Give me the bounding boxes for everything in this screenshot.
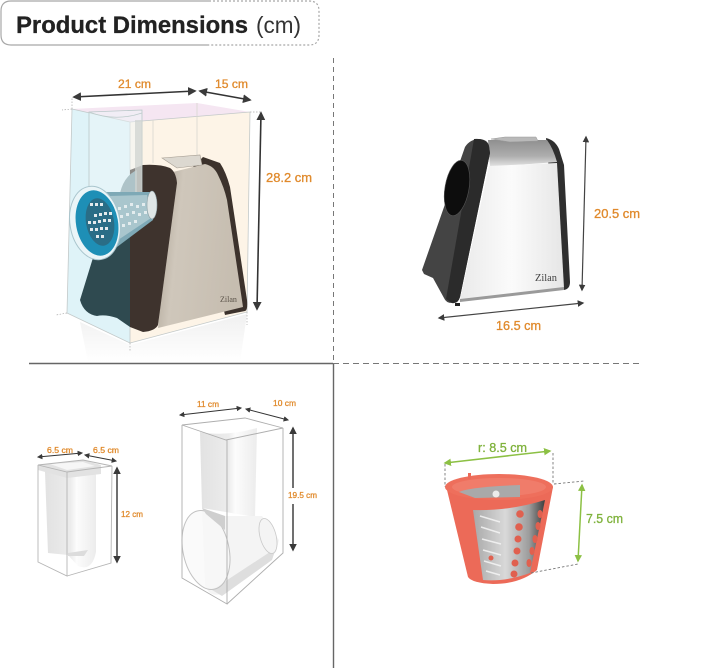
dimension 6.5 cm depth: 6.5 cm	[93, 446, 119, 455]
feet	[455, 303, 460, 306]
guide lines	[445, 453, 584, 573]
panel: pusher	[38, 446, 143, 576]
dimension 21 cm: 21 cm	[118, 77, 151, 91]
dimension 7.5 cm: 7.5 cm	[586, 512, 623, 526]
drive opening	[440, 158, 474, 218]
panel dividers	[29, 58, 640, 668]
panel: grater cone	[445, 441, 623, 584]
machine body: Zilan	[220, 295, 237, 304]
dimension box	[56, 98, 262, 352]
brand: Zilan	[535, 273, 557, 284]
grater holes	[488, 510, 542, 578]
chute tube	[200, 428, 257, 517]
dimension r: 8.5 cm	[445, 441, 550, 463]
food chute	[89, 110, 142, 200]
blade ridges	[480, 516, 501, 575]
title badge	[1, 1, 319, 45]
top button	[491, 137, 538, 142]
drum housing	[202, 508, 279, 595]
title badge: Product Dimensions	[16, 12, 248, 39]
dimension 19.5 cm	[288, 428, 317, 550]
dimension 11 cm	[180, 400, 241, 415]
dimension 10 cm: 10 cm	[273, 399, 296, 408]
pusher body	[45, 472, 96, 567]
dimension 7.5 cm	[578, 485, 623, 561]
rim	[445, 474, 553, 500]
title badge: (cm)	[256, 12, 301, 38]
right dark band	[546, 138, 570, 290]
dimension 28.2 cm	[257, 113, 312, 309]
dimension 11 cm: 11 cm	[197, 400, 219, 409]
reflection under machine	[80, 314, 247, 362]
steel top section	[488, 140, 557, 167]
dimension 16.5 cm: 16.5 cm	[496, 319, 541, 333]
dimension 28.2 cm: 28.2 cm	[266, 171, 312, 185]
dimension 12 cm: 12 cm	[121, 510, 143, 519]
dimension 20.5 cm: 20.5 cm	[594, 207, 640, 221]
panel: chute	[175, 399, 317, 604]
dimension 15 cm	[200, 77, 250, 100]
panel: full machine with dimension box	[56, 77, 312, 362]
steel blade sheet	[473, 500, 545, 580]
panel: main unit without drum	[422, 137, 640, 333]
dimension r: 8.5 cm: r: 8.5 cm	[478, 441, 527, 455]
bounding box	[38, 460, 112, 576]
bounding box	[182, 418, 283, 604]
steel front panel	[460, 163, 564, 300]
dimension 15 cm: 15 cm	[215, 77, 248, 91]
dimension 6.5 cm width: 6.5 cm	[47, 446, 73, 455]
machine body	[80, 155, 247, 332]
dimension 19.5 cm: 19.5 cm	[288, 490, 317, 500]
dimension 21 cm	[74, 77, 195, 97]
inner blade	[459, 485, 520, 498]
dimension 20.5 cm	[582, 137, 640, 290]
cone body	[447, 487, 553, 584]
dimension 10 cm	[246, 399, 296, 420]
grater drum	[64, 182, 157, 264]
dimension 16.5 cm	[439, 303, 583, 333]
dark side housing	[422, 139, 490, 303]
